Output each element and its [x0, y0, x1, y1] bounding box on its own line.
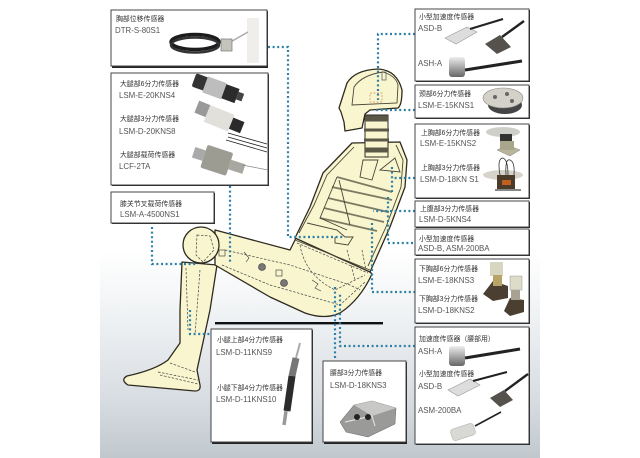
icon: upper chest 3-axis sensor — [483, 158, 523, 190]
model: DTR-S-80S1 — [115, 26, 160, 35]
heading: 小型加速度传感器 — [419, 12, 474, 21]
head sensor marks — [370, 72, 386, 102]
heading: 下胸部6分力传感器 — [419, 264, 478, 273]
icon: ASD-B — [445, 19, 524, 54]
skull inner — [352, 72, 398, 105]
panel: lower leg sensors — [211, 329, 313, 444]
internal dashed structure — [158, 235, 368, 384]
panel: knee sensor — [111, 192, 215, 224]
icon: displacement sensor — [171, 18, 259, 63]
model: LSM-D-18KNS3 — [330, 381, 387, 390]
dummy body — [124, 69, 407, 391]
heading: 大腿部6分力传感器 — [120, 79, 179, 88]
model: LSM-E-18KNS3 — [418, 276, 475, 285]
heading: 上胸部6分力传感器 — [421, 128, 480, 137]
torso — [295, 142, 407, 272]
icon: lower leg rod sensor — [284, 343, 300, 425]
heading: 颈部6分力传感器 — [419, 89, 471, 98]
panel: lower chest sensors — [415, 259, 530, 324]
model: ASM-200BA — [418, 406, 462, 415]
model: LSM-D-18KNS2 — [418, 306, 475, 315]
chest ribs — [320, 177, 392, 231]
model: ASH-A — [418, 347, 443, 356]
model: LSM-E-15KNS2 — [420, 139, 476, 148]
heading: 下胸部3分力传感器 — [419, 294, 478, 303]
model: LSM-D-11KNS9 — [216, 348, 273, 357]
neck — [364, 115, 389, 157]
panel: chest displacement sensor — [111, 10, 268, 68]
heading: 小型加速度传感器 — [419, 234, 474, 243]
icon: lower chest 3-axis sensor — [504, 276, 524, 316]
heading: 腰部3分力传感器 — [330, 368, 382, 377]
model: LSM-D-18KN S1 — [420, 175, 479, 184]
model: LSM-E-15KNS1 — [418, 101, 474, 110]
connector lines — [152, 34, 415, 358]
heading: 膝关节叉载荷传感器 — [120, 199, 182, 208]
icon: neck sensor — [483, 88, 523, 114]
panel: thigh sensors — [111, 72, 269, 186]
model: LCF-2TA — [119, 162, 151, 171]
icon: ASH-A — [449, 57, 522, 77]
panel: waist sensor — [323, 361, 407, 444]
heading: 小腿下部4分力传感器 — [217, 383, 283, 392]
icon: 3-axis thigh sensor — [193, 101, 267, 152]
heading: 上腹部3分力传感器 — [420, 204, 479, 213]
knee joint — [183, 227, 219, 263]
model: ASD-B — [418, 24, 442, 33]
panel: head accelerometers — [415, 9, 530, 82]
heading: 加速度传感器（腰部用） — [419, 334, 495, 343]
joint details — [219, 250, 321, 291]
heading: 小型加速度传感器 — [419, 369, 474, 378]
panel: upper abdomen sensor — [415, 201, 530, 228]
lower leg — [124, 262, 217, 391]
heading: 胸部位移传感器 — [116, 14, 164, 23]
icon: waist sensor block — [340, 401, 396, 437]
model: ASD-B — [418, 382, 442, 391]
model: LSM-A-4500NS1 — [120, 210, 180, 219]
model: LSM-D-5KNS4 — [419, 215, 472, 224]
torso inner contour — [299, 145, 403, 266]
icon: lower chest 6-axis sensor — [483, 262, 508, 301]
icon: ASD-B — [448, 372, 528, 407]
icon: upper chest 6-axis sensor — [486, 127, 520, 156]
seat line — [215, 322, 383, 324]
chest frame — [295, 158, 400, 270]
model: ASD-B, ASM-200BA — [418, 244, 490, 253]
panel: abdomen accelerometer — [415, 229, 530, 256]
panel: neck sensor — [415, 85, 530, 119]
icon: 6-axis thigh sensor — [191, 72, 246, 106]
head — [339, 69, 402, 131]
heading: 上胸部3分力传感器 — [421, 163, 480, 172]
heading: 小腿上部4分力传感器 — [217, 335, 283, 344]
icon: ASH-A — [449, 346, 520, 366]
heading: 大腿部载荷传感器 — [120, 150, 175, 159]
panel: upper chest sensors — [415, 124, 530, 199]
model: LSM-E-20KNS4 — [119, 91, 176, 100]
model: LSM-D-11KNS10 — [216, 395, 277, 404]
model: LSM-D-20KNS8 — [119, 127, 176, 136]
heading: 大腿部3分力传感器 — [120, 114, 179, 123]
background gradient — [100, 0, 540, 458]
panel: waist accelerometers — [415, 327, 530, 445]
icon: thigh load sensor — [190, 141, 248, 181]
thigh and pelvis — [215, 230, 372, 316]
model: ASH-A — [418, 59, 443, 68]
icon: ASM-200BA — [450, 412, 501, 441]
